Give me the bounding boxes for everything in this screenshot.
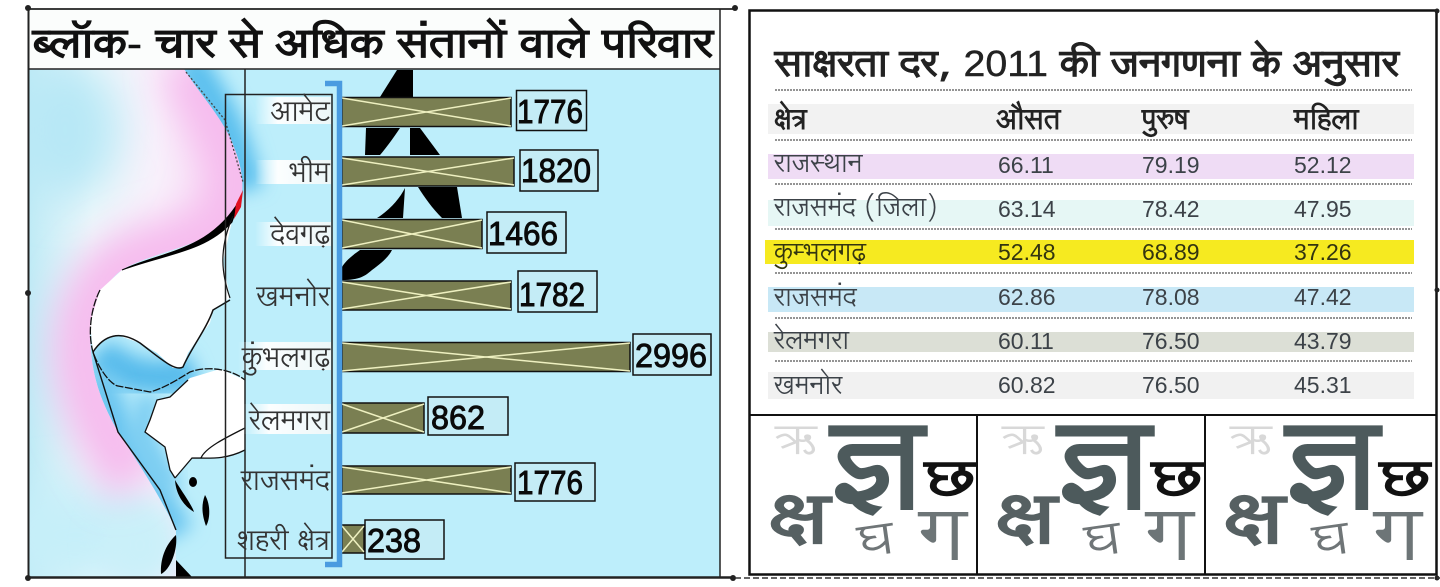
row: खमनोर (773, 367, 1352, 408)
panel: literacy rate table (750, 8, 1440, 587)
bar: रेलमगरा (342, 403, 424, 433)
letter tile 2 (995, 373, 1205, 587)
row: राजसमंद (जिला): 63.14 (998, 196, 1056, 222)
letter tile 2: ज्ञ (1055, 373, 1155, 571)
row: कुम्भलगढ़ (773, 234, 1352, 275)
table rows (773, 145, 1352, 408)
bar: देवगढ़ (342, 220, 482, 248)
bar: आमेट (342, 98, 511, 126)
value: 238: 238 (367, 522, 421, 559)
value: 238 (365, 520, 444, 559)
white child face (145, 369, 245, 478)
row: राजस्थान (773, 145, 1352, 186)
letter tile 1: क्ष (768, 467, 833, 579)
letter tile 3: घ (1307, 504, 1356, 581)
row: राजसमंद: 47.42 (1294, 284, 1352, 310)
panel: family planning blocks (0, 5, 738, 587)
white face (90, 216, 233, 368)
leaves (175, 480, 194, 512)
table header (774, 99, 1360, 144)
row: रेलमगरा: रेलमगरा (773, 322, 850, 363)
dotted dividers (775, 90, 1412, 361)
row: खमनोर: 76.50 (1142, 372, 1200, 398)
bar: कुंभलगढ़ (342, 342, 630, 372)
row: राजसमंद (जिला): 78.42 (1142, 196, 1200, 222)
row backgrounds (765, 104, 1414, 399)
right frame handles (1434, 8, 1440, 580)
letters strip frame (750, 415, 1436, 574)
value: 1466: 1466 (488, 215, 558, 252)
value labels (365, 90, 711, 559)
letter tile 3: ऋ (1229, 409, 1274, 476)
black hair strokes (342, 70, 462, 280)
row: खमनोर: 60.82 (998, 372, 1056, 398)
bar: शहरी क्षेत्र (342, 525, 364, 553)
bar: भीम (342, 157, 514, 186)
row: रेलमगरा: 60.11 (998, 328, 1054, 354)
letter tile 1: ज्ञ (828, 373, 928, 571)
panel frame (750, 10, 1436, 574)
illustration: mother and child silhouette (0, 60, 475, 587)
row: कुम्भलगढ़: 37.26 (1294, 239, 1352, 265)
row: रेलमगरा (773, 322, 1352, 363)
letter tile 1: घ (852, 504, 901, 581)
row: राजस्थान: 52.12 (1294, 152, 1352, 178)
row: राजसमंद: 62.86 (998, 284, 1056, 310)
table title: साक्षरता दर, 2011 की जनगणना के अनुसार (773, 38, 1401, 95)
value: 1776: 1776 (517, 464, 583, 501)
letter tile 3 (1223, 373, 1433, 587)
row: राजसमंद (जिला) (773, 189, 1352, 230)
bar: खमनोर (342, 281, 511, 310)
letter tile 2: घ (1079, 504, 1128, 581)
category labels box: देवगढ़ (270, 214, 331, 259)
row: खमनोर: खमनोर (773, 367, 843, 408)
table header: औसत (996, 99, 1062, 144)
letter tile 1 (768, 373, 978, 587)
row: राजस्थान: 66.11 (998, 152, 1054, 178)
row: रेलमगरा: 76.50 (1142, 328, 1200, 354)
category labels box: रेलमगरा (248, 400, 331, 445)
row: रेलमगरा: 43.79 (1294, 328, 1352, 354)
row: राजसमंद (जिला): राजसमंद (जिला) (773, 189, 938, 230)
letter tile 3: छ (1377, 441, 1433, 524)
row: राजसमंद: 78.08 (1142, 284, 1200, 310)
bar: राजसमंद (342, 466, 511, 494)
vertical guide line (244, 69, 246, 577)
row: कुम्भलगढ़: कुम्भलगढ़ (773, 234, 867, 275)
category labels box: शहरी क्षेत्र (237, 520, 331, 565)
table header: पुरुष (1141, 99, 1190, 144)
value: 862 (428, 397, 508, 436)
row: राजसमंद (जिला): 47.95 (1294, 196, 1352, 222)
left pale zone (30, 70, 242, 576)
category labels box: कुंभलगढ़ (241, 337, 331, 382)
row: खमनोर: 45.31 (1294, 372, 1352, 398)
category labels box: भीम (289, 152, 331, 197)
blue axis bracket (325, 84, 340, 564)
title band: ब्लॉक - चार से अधिक संतानों वाले परिवार (31, 14, 715, 77)
letter tile 2: ऋ (1001, 409, 1046, 476)
value: 862: 862 (431, 399, 485, 436)
panel frame (28, 9, 735, 578)
letter tile 3: क्ष (1223, 467, 1288, 579)
profile outlines (186, 72, 243, 182)
letter tile 2: क्ष (995, 467, 1060, 579)
dashed bottom rule (735, 577, 1440, 579)
letter tile 1: छ (922, 441, 978, 524)
row: कुम्भलगढ़: 52.48 (998, 239, 1056, 265)
table header: क्षेत्र (774, 99, 808, 144)
table header: महिला (1293, 99, 1360, 144)
bar chart (342, 98, 630, 553)
category labels box (226, 91, 332, 565)
row: कुम्भलगढ़: 68.89 (1142, 239, 1200, 265)
row: राजसमंद: राजसमंद (773, 279, 858, 320)
row: राजस्थान: राजस्थान (773, 145, 864, 186)
value: 2996: 2996 (635, 337, 707, 374)
frame corner handles (25, 5, 738, 581)
category labels box: राजसमंद (240, 460, 331, 505)
row: राजसमंद (773, 279, 1352, 320)
category labels box: खमनोर (255, 276, 331, 321)
value: 1776: 1776 (517, 93, 583, 130)
value: 1782: 1782 (519, 276, 585, 313)
letter tile 2: छ (1149, 441, 1205, 524)
letter tile 1: ऋ (774, 409, 819, 476)
row: राजस्थान: 79.19 (1142, 152, 1200, 178)
value: 1820: 1820 (521, 152, 591, 189)
category labels box: आमेट (270, 91, 331, 136)
letter tile 3: ज्ञ (1283, 373, 1383, 571)
